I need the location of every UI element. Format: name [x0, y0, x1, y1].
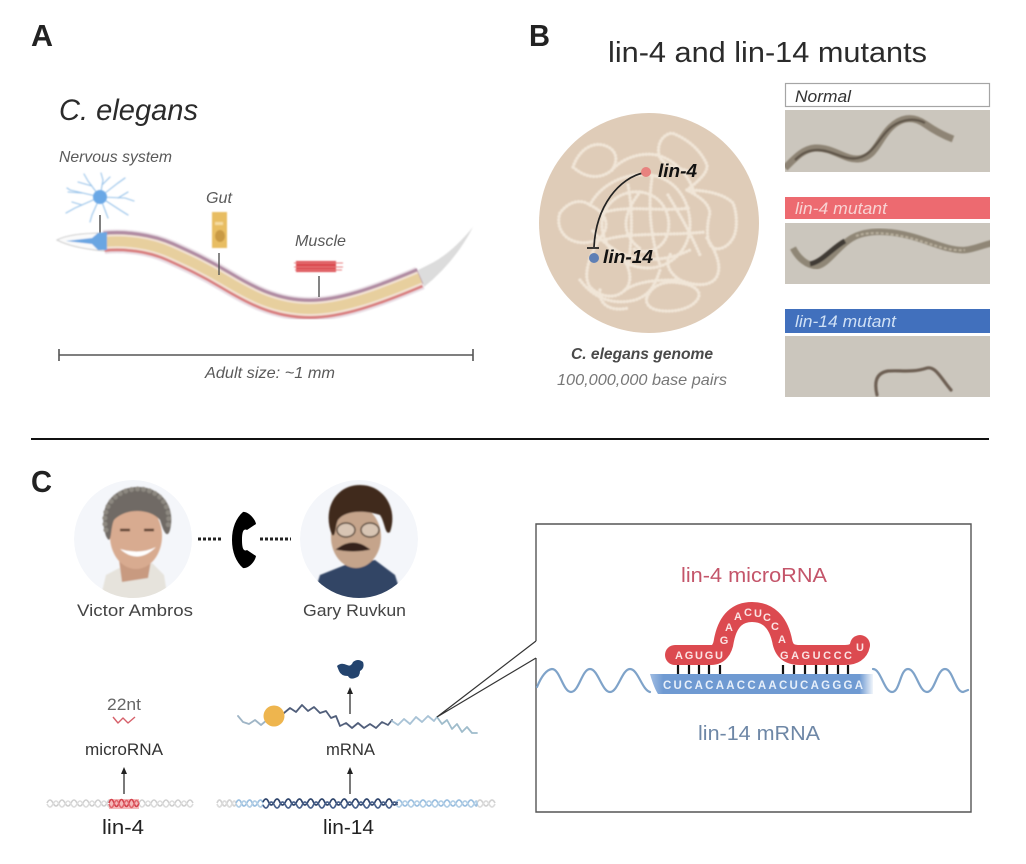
microRNA squiggle — [113, 717, 135, 723]
zoom box — [536, 524, 971, 812]
label: lin-4 microRNA: lin-4 microRNA — [681, 564, 827, 587]
lin-14 mRNA bar — [650, 674, 873, 694]
label: lin-14 mRNA: lin-14 mRNA — [698, 722, 820, 745]
label bar: lin-4 mutant — [785, 197, 990, 219]
label: lin-4 gene: lin-4 — [658, 161, 697, 181]
photo: normal worm — [785, 110, 990, 172]
call line right — [260, 538, 291, 540]
label: mRNA: mRNA — [326, 740, 376, 759]
marker: lin-14 — [589, 253, 599, 263]
photo: lin-4 mutant worm — [785, 223, 992, 284]
lin-14 mRNA bar: CUCACAACCAACUCAGGGA — [663, 680, 863, 692]
lin-4 microRNA hairpin: C — [771, 621, 779, 633]
caption: base pairs: 100,000,000 base pairs — [557, 372, 727, 389]
lin-4 microRNA hairpin — [675, 607, 864, 662]
lin-4 microRNA hairpin: G — [720, 635, 728, 647]
lin-4 microRNA hairpin: C — [744, 607, 752, 619]
label: microRNA: microRNA — [85, 740, 164, 759]
icon: telephone — [232, 512, 256, 568]
arrow: lin-14 to mRNA — [347, 767, 353, 794]
label bar: lin-14 mutant — [785, 309, 990, 333]
lin-4 microRNA hairpin: A — [725, 622, 733, 634]
portrait: Gary Ruvkun — [300, 480, 418, 600]
caption: genome: C. elegans genome — [571, 346, 713, 363]
lin-4 microRNA hairpin: A — [734, 611, 742, 623]
label: lin-14 gene: lin-14 — [603, 247, 653, 267]
label bar: normal: Normal — [795, 88, 852, 106]
label bar: lin-4 mutant: lin-4 mutant — [795, 200, 888, 218]
zoom wedge lines — [437, 641, 536, 717]
illustration: worm body — [57, 227, 473, 311]
DNA: lin-4 locus — [47, 799, 193, 809]
name: Gary Ruvkun: Gary Ruvkun — [303, 602, 406, 620]
panel C: discovery — [31, 464, 971, 839]
panel letter A: A — [31, 18, 53, 53]
heading: mutants: lin-4 and lin-14 mutants — [608, 37, 927, 69]
label: muscle: Muscle — [295, 233, 346, 250]
heading: C. elegans: C. elegans — [59, 94, 198, 127]
label: adult size: Adult size: ~1 mm — [204, 365, 335, 382]
ribosome — [264, 706, 284, 726]
lin-4 microRNA hairpin: A — [778, 634, 786, 646]
panel B: mutants — [529, 18, 992, 397]
mRNA waves — [537, 669, 968, 692]
label: gut: Gut — [206, 190, 233, 207]
panel letter C: C — [31, 464, 52, 499]
protein — [337, 660, 364, 679]
name: Victor Ambros: Victor Ambros — [77, 602, 193, 620]
inhibition arc — [587, 173, 643, 248]
arrow: mRNA to protein — [347, 687, 353, 714]
label bar: lin-14 mutant: lin-14 mutant — [795, 313, 897, 331]
label bar: normal — [786, 84, 990, 106]
panel A: worm anatomy — [31, 18, 473, 382]
base pair ticks — [678, 665, 848, 674]
arrow: lin-4 to microRNA — [121, 767, 127, 794]
label: nervous system: Nervous system — [59, 149, 172, 166]
portrait: Victor Ambros — [74, 480, 192, 600]
lin-4 microRNA hairpin: C — [763, 612, 771, 624]
DNA: lin-14 locus — [217, 799, 495, 808]
label: lin-14 gene: lin-14 — [323, 816, 374, 839]
genome tangle — [559, 133, 736, 311]
scale bar — [59, 349, 473, 361]
pointer: neuron — [99, 215, 101, 241]
icon: gut cell — [212, 212, 227, 248]
lin-4 microRNA hairpin: GAGUCCC — [780, 650, 852, 662]
marker: lin-4 — [641, 167, 651, 177]
lin-4 microRNA hairpin: U — [754, 608, 762, 620]
genome circle — [539, 113, 759, 333]
icon: muscle fibre — [294, 261, 343, 272]
call line left — [198, 538, 221, 540]
lin-4 microRNA hairpin: U — [856, 642, 864, 654]
pointer: gut — [218, 253, 220, 275]
icon: neuron — [66, 173, 134, 222]
label: 22nt: 22nt — [107, 696, 141, 714]
mRNA strand — [238, 705, 477, 733]
label: lin-4 gene: lin-4 — [102, 816, 144, 839]
divider — [31, 438, 989, 440]
pointer: muscle — [318, 276, 320, 297]
lin-4 microRNA hairpin: AGUGU — [675, 650, 723, 662]
panel letter B: B — [529, 18, 550, 53]
photo: lin-14 mutant worm — [785, 336, 990, 397]
